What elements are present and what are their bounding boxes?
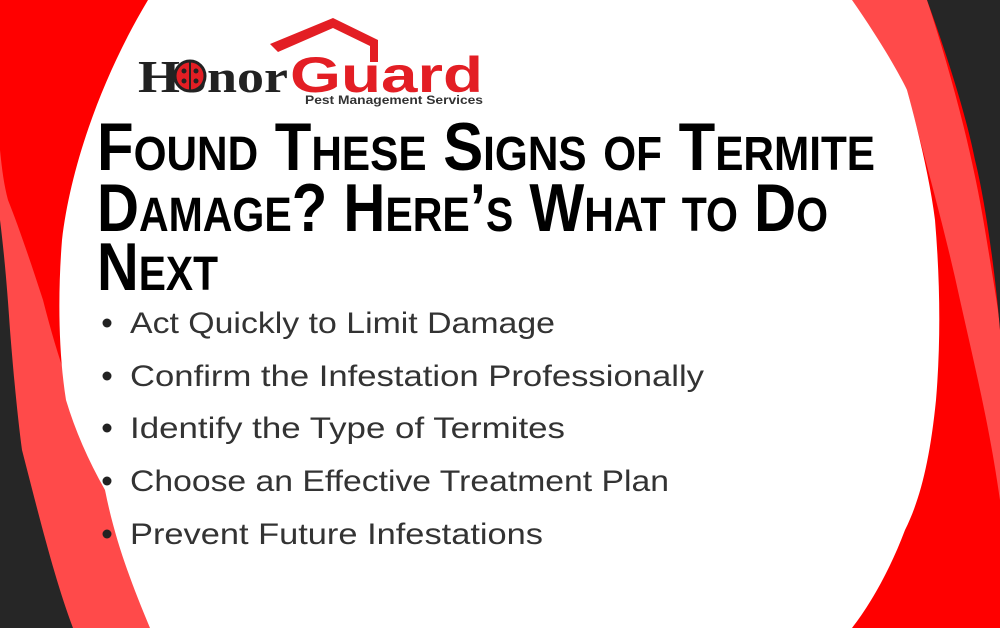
logo: HonorGuard: [138, 18, 483, 107]
title: Next: [97, 229, 218, 305]
logo ladybug: [175, 61, 205, 91]
bullet list: [102, 307, 704, 551]
bullet 2: Confirm the Infestation Professionally: [130, 360, 704, 393]
title: [97, 109, 875, 305]
background: left swoosh: [0, 0, 200, 628]
logo roof: [270, 18, 378, 62]
bullet 5: Prevent Future Infestations: [130, 518, 543, 551]
logo: HonorGuard: Guard: [290, 47, 483, 103]
title: Damage? Here’s What to Do: [97, 170, 828, 246]
background: right swoosh: [800, 0, 1000, 628]
bullet 3: Identify the Type of Termites: [130, 412, 565, 445]
logo wordmark: Honor: [138, 51, 288, 102]
title: Found These Signs of Termite: [97, 109, 875, 185]
bullet 1: Act Quickly to Limit Damage: [130, 307, 555, 340]
bullet 4: Choose an Effective Treatment Plan: [130, 465, 669, 498]
logo tagline: Pest Management Services: [305, 93, 483, 107]
